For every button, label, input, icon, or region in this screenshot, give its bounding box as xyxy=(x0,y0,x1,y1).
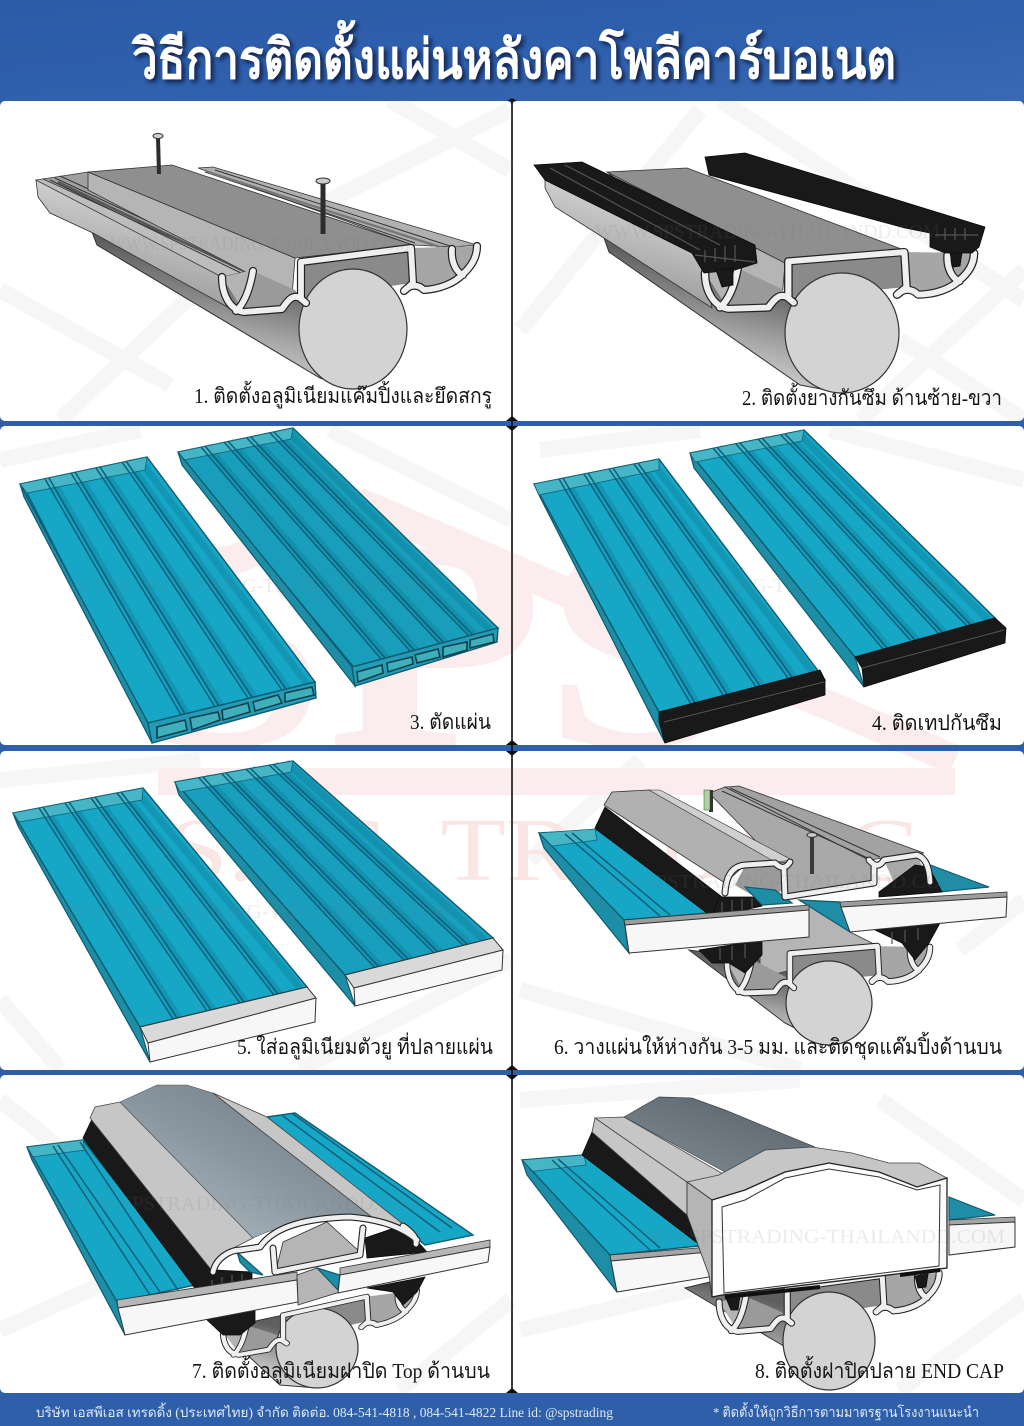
watermark url: WWW.SPSTRADING-THAILANDD.COM xyxy=(595,221,940,243)
watermark: red SPS logo: SPS xyxy=(130,478,740,810)
pipe xyxy=(220,1308,358,1388)
caption 3: 3. ตัดแผ่น xyxy=(410,710,491,734)
watermark: red SPS logo xyxy=(130,478,955,900)
centre blue gap xyxy=(745,887,792,905)
pipe end xyxy=(783,1292,875,1390)
pipe end xyxy=(785,273,899,393)
aluminium U right xyxy=(840,892,1007,932)
profile section xyxy=(705,242,974,319)
watermark: red SPS logo: S.P.S. TRADING xyxy=(168,801,923,900)
top cap right strip xyxy=(213,1093,417,1235)
cap left strip xyxy=(595,1117,725,1182)
lower gaskets xyxy=(699,923,940,973)
sheet right side xyxy=(799,900,850,932)
base plate side xyxy=(88,172,295,296)
centre channel lower xyxy=(760,902,880,978)
caption 6: 6. วางแผ่นให้ห่างกัน 3-5 มม. และติดชุดแค๊มปิ้งด้านบน xyxy=(554,1032,1002,1060)
blue gaps xyxy=(237,1252,263,1275)
sheet left xyxy=(13,788,316,1062)
base profile xyxy=(719,1273,939,1332)
end cap side xyxy=(687,1182,712,1297)
top cap dome xyxy=(120,1085,373,1238)
clip interior left xyxy=(735,864,784,900)
pipe xyxy=(92,232,407,388)
rubber left xyxy=(595,807,762,917)
sheet right blue xyxy=(925,863,989,893)
pipe end xyxy=(276,1308,358,1388)
footer company contact: บริษัท เอสพีเอส เทรดดิ้ง (ประเทศไทย) จำกัด ติดต่อ. 084-541-4818 , 084-541-4822 Line id: @spstrading xyxy=(36,1402,613,1420)
sheet left top xyxy=(539,830,709,920)
base plate top xyxy=(88,165,413,258)
channel interior xyxy=(276,1222,360,1270)
aluminium U xyxy=(345,938,503,1006)
pipe end xyxy=(299,269,407,389)
clip tag xyxy=(704,790,710,810)
gutter right xyxy=(198,167,477,247)
footer note: * ติดตั้งให้ถูกวิธีการตามมาตรฐานโรงงานแนะนำ xyxy=(713,1402,979,1421)
top clip centre channel xyxy=(709,787,874,897)
title: วิธีการติดตั้งแผ่นหลังคาโพลีคาร์บอเนต xyxy=(131,20,896,90)
watermark url: WWW.SPSTRADING-THAILANDD.COM xyxy=(625,1226,1005,1248)
sheet right blue xyxy=(267,1113,473,1245)
panel: step 3 xyxy=(0,426,511,745)
profile section xyxy=(719,1273,939,1332)
column divider xyxy=(511,100,513,1393)
watermark url: WWW.SPSTRADING-THAILANDD.COM xyxy=(585,575,940,597)
screw top xyxy=(709,790,713,812)
panel: step 1 xyxy=(0,101,511,421)
rubber gasket right xyxy=(705,153,985,267)
screw front xyxy=(807,833,817,874)
top cap section xyxy=(213,1217,417,1272)
clip interior xyxy=(884,855,928,885)
top clip left xyxy=(604,790,789,883)
watermark url: WWW.SPSTRADING-THAILANDD.COM xyxy=(60,1193,425,1215)
rubber right xyxy=(879,865,942,897)
rubber gasket left xyxy=(534,162,757,287)
footer bar xyxy=(0,1393,1024,1426)
cap dome xyxy=(624,1097,815,1172)
gutter left xyxy=(545,180,712,308)
aluminium U left xyxy=(624,905,809,953)
band junction diamonds xyxy=(506,98,518,1393)
caption 5: 5. ใส่อลูมิเนียมตัวยู ที่ปลายแผ่น xyxy=(237,1032,493,1060)
channel left xyxy=(43,172,295,295)
tape xyxy=(855,618,1006,687)
profile section xyxy=(727,937,930,1002)
screw 1 xyxy=(153,133,163,174)
gutter left top strip xyxy=(36,179,253,277)
sheet right xyxy=(690,430,1006,687)
sheet left xyxy=(20,457,316,743)
top clip right xyxy=(725,786,924,860)
watermark url: WWW.SPSTRADING-THAILANDD.COM xyxy=(110,233,410,255)
rubber xyxy=(582,1132,720,1252)
aluminium U left xyxy=(117,1272,298,1335)
screw 2 xyxy=(316,178,330,234)
panel: step 7 xyxy=(0,1075,511,1393)
base profile xyxy=(222,246,477,312)
sheet left blue xyxy=(27,1140,195,1302)
sheet left cells xyxy=(539,829,597,847)
sheet left side xyxy=(522,1160,617,1292)
rubber left xyxy=(83,1115,252,1295)
aluminium U right xyxy=(949,1217,1015,1255)
cap side wall xyxy=(592,1118,687,1215)
end cap front xyxy=(712,1163,947,1297)
sheet right xyxy=(178,428,498,686)
sheet left side xyxy=(27,1147,125,1335)
gasket feet xyxy=(726,1274,928,1310)
sheet left xyxy=(534,459,825,743)
pipe xyxy=(604,238,899,393)
top clip section xyxy=(725,855,930,897)
top cap left strip xyxy=(90,1102,253,1272)
pipe xyxy=(689,950,872,1046)
panel: step 2 xyxy=(513,101,1024,421)
aluminium U xyxy=(140,987,316,1062)
caption 8: 8. ติดตั้งฝาปิดปลาย END CAP xyxy=(755,1356,1004,1383)
rubber right xyxy=(365,1225,427,1258)
base profile xyxy=(727,937,930,1002)
plate side xyxy=(607,172,785,300)
aluminium U right xyxy=(338,1240,490,1293)
sheet left blue xyxy=(522,1155,709,1255)
base profile xyxy=(223,1290,417,1357)
plate top xyxy=(607,168,904,263)
tape xyxy=(659,670,825,743)
profile section xyxy=(222,246,477,312)
pipe end xyxy=(786,961,872,1045)
watermark url: WWW.SPSTRADING-THAILANDD.COM xyxy=(580,871,960,893)
bottom gasket strip xyxy=(725,1270,940,1297)
caption 4: 4. ติดเทปกันซึม xyxy=(872,711,1002,735)
profile section xyxy=(223,1290,417,1357)
end cap top band xyxy=(687,1147,947,1200)
panel: step 6 xyxy=(513,751,1024,1070)
gutter left outer xyxy=(36,180,233,310)
panel: step 4 xyxy=(513,426,1024,745)
caption 2: 2. ติดตั้งยางกันซึม ด้านซ้าย-ขวา xyxy=(742,383,1002,410)
sheet right xyxy=(175,761,503,1006)
sheet left side xyxy=(539,833,629,953)
aluminium U left xyxy=(610,1247,709,1292)
header banner xyxy=(0,0,1024,101)
base profile xyxy=(705,242,974,319)
watermark url: WWW.SPSTRADING-THAILANDD.COM xyxy=(75,575,430,597)
sheet right blue xyxy=(949,1197,995,1220)
panel: step 5 xyxy=(0,751,511,1070)
pipe xyxy=(685,1270,875,1390)
lower gaskets xyxy=(205,1277,425,1335)
centre web xyxy=(297,1268,340,1305)
watermark url: WWW.SPSTRADING-THAILANDD.COM xyxy=(70,901,445,923)
caption 1: 1. ติดตั้งอลูมิเนียมแค๊มปิ้งและยึดสกรู xyxy=(194,381,492,409)
panel: step 8 xyxy=(513,1075,1024,1393)
caption 7: 7. ติดตั้งอลูมิเนียมฝาปิด Top ด้านบน xyxy=(192,1356,490,1384)
